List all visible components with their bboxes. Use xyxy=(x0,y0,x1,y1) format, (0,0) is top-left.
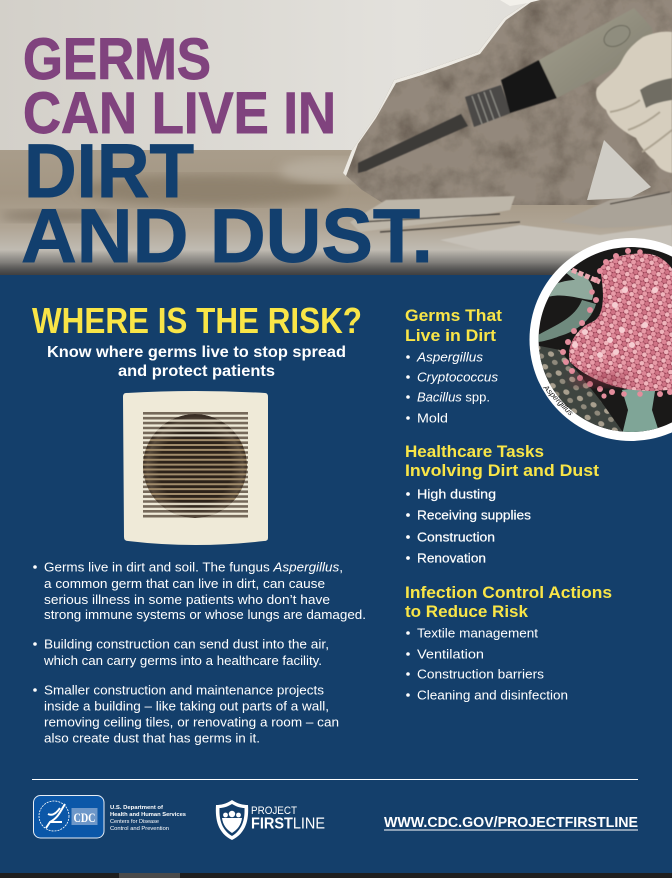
website link: WWW.CDC.GOV/PROJECTFIRSTLINE xyxy=(384,815,638,831)
bullet: smaller projects: Smaller construction and maintenance projects xyxy=(44,682,324,698)
agency text xyxy=(110,805,186,832)
bullet: germs live in dirt: strong immune systems or whose lungs are damaged. xyxy=(44,607,366,622)
bullet: germs live in dirt: serious illness in some patients who don’t have xyxy=(44,592,330,607)
agency text: Health and Human Services xyxy=(110,812,186,818)
photo circle: aspergillus micrograph xyxy=(530,238,672,441)
bullet: smaller projects xyxy=(33,682,339,746)
heading: Infection Control Actions xyxy=(405,583,612,602)
bullet: building construction: which can carry germs into a healthcare facility. xyxy=(43,653,322,668)
heading xyxy=(405,442,599,480)
logo: HHS and CDC xyxy=(34,796,186,838)
heading: where is the risk: WHERE IS THE RISK? xyxy=(32,300,362,341)
bullet: germs live in dirt: Germs live in dirt and soil. The fungus Aspergillus , xyxy=(44,560,343,574)
title line: and dust: AND DUST. xyxy=(21,194,433,279)
list: Ventilation xyxy=(417,646,484,662)
bullet: building construction: Building construction can send dust into the air, xyxy=(44,636,329,652)
image: dirty air vent xyxy=(123,391,268,545)
debris xyxy=(350,192,672,252)
title line: dirt: DIRT xyxy=(24,129,194,214)
heading: Germs That xyxy=(405,306,502,325)
bullet: germs live in dirt xyxy=(33,560,366,622)
heading: Healthcare Tasks xyxy=(405,442,544,461)
plaster patch right xyxy=(587,140,651,200)
list: Renovation xyxy=(417,550,486,566)
title line: can live in: CAN LIVE IN xyxy=(23,81,336,146)
title xyxy=(21,27,433,279)
heading: Live in Dirt xyxy=(405,326,496,345)
photo: worker chiselling a wall xyxy=(0,0,672,275)
subheading: Know where germs live to stop spread xyxy=(47,344,346,361)
icon: CDC mark: CDC xyxy=(74,811,96,825)
icon: CDC mark xyxy=(72,808,98,825)
list: High dusting xyxy=(417,486,496,502)
panel: infection control actions xyxy=(405,583,612,702)
heading: Involving Dirt and Dust xyxy=(405,461,599,480)
icon: shield xyxy=(216,800,248,840)
panel: healthcare tasks xyxy=(405,442,599,566)
heading xyxy=(405,306,502,345)
panel: germs that live in dirt xyxy=(405,306,502,426)
image caption: Aspergillus: Aspergillus xyxy=(541,382,575,418)
bullet: smaller projects: also create dust that has germs in it. xyxy=(44,730,260,746)
heading xyxy=(405,583,612,621)
agency text: U.S. Department of xyxy=(110,805,163,811)
subheading xyxy=(47,344,346,380)
logo: Project Firstline xyxy=(216,800,325,840)
text block: risk bullets xyxy=(33,560,366,746)
wordmark xyxy=(251,805,325,832)
list: Bacillus spp. xyxy=(417,390,490,404)
list xyxy=(406,486,532,566)
list: Aspergillus xyxy=(416,350,484,364)
bullet: smaller projects: removing ceiling tiles, or renovating a room – can xyxy=(44,714,339,730)
list xyxy=(406,626,568,702)
wordmark: FIRSTLINE xyxy=(251,816,325,832)
bullet: smaller projects: inside a building – like taking out parts of a wall, xyxy=(44,698,329,714)
agency text: Control and Prevention xyxy=(110,826,169,832)
heading: to Reduce Risk xyxy=(405,602,529,621)
icon: HHS eagle xyxy=(39,801,69,831)
spore edge clusters xyxy=(560,248,672,399)
title line: germs: GERMS xyxy=(23,27,211,92)
list: Receiving supplies xyxy=(417,508,532,522)
exposed masonry xyxy=(343,0,672,205)
list: Mold xyxy=(417,410,448,426)
list: Textile management xyxy=(417,626,538,640)
icon: pneumatic chisel xyxy=(358,8,654,173)
wordmark: PROJECT xyxy=(251,805,297,817)
bullet: building construction xyxy=(33,636,329,668)
bottom strip xyxy=(0,873,672,878)
list xyxy=(406,350,499,426)
list: Construction xyxy=(417,530,495,544)
subheading: and protect patients xyxy=(118,363,275,380)
list: Cleaning and disinfection xyxy=(417,688,568,702)
list: Cryptococcus xyxy=(417,370,499,384)
bullet: germs live in dirt: a common germ that can live in dirt, can cause xyxy=(44,576,325,591)
icon: gloved hand xyxy=(596,32,672,173)
list: Construction barriers xyxy=(417,666,545,682)
agency text: Centers for Disease xyxy=(110,819,159,825)
